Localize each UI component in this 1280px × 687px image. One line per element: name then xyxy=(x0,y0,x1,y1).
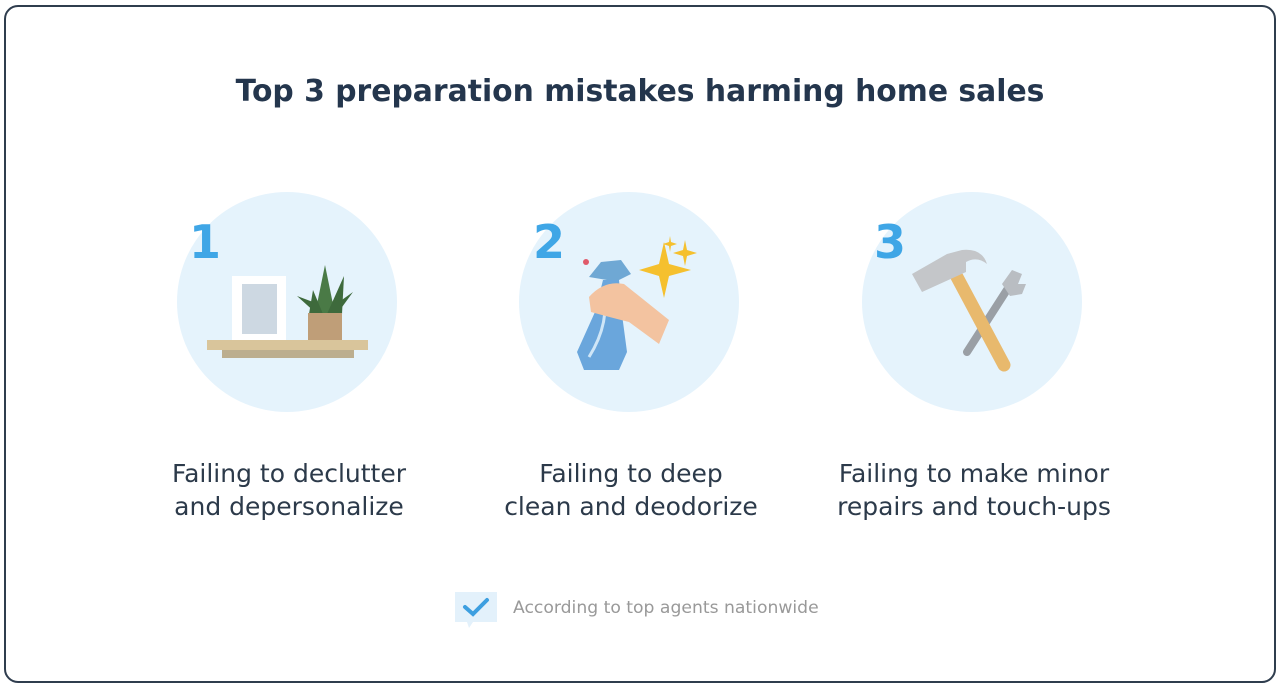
icon 2: hand with spray bottle and sparkles xyxy=(519,192,739,412)
title: Top 3 preparation mistakes harming home sales xyxy=(236,74,1044,109)
label 1: and depersonalize xyxy=(174,492,404,521)
label 3: Failing to make minor xyxy=(839,459,1109,488)
icon 3: hammer and wrench xyxy=(862,192,1082,412)
icon 3: hammer and wrench: 3 xyxy=(874,215,906,269)
label 1 xyxy=(172,459,406,521)
footnote: According to top agents nationwide xyxy=(513,598,819,618)
label 1: Failing to declutter xyxy=(172,459,406,488)
label 2: Failing to deep xyxy=(539,459,723,488)
label 3 xyxy=(837,459,1111,521)
label 2: clean and deodorize xyxy=(504,492,758,521)
icon 2: hand with spray bottle and sparkles: 2 xyxy=(533,215,565,269)
icon 1: shelf with frame and plant: 1 xyxy=(189,215,221,269)
icon: check badge xyxy=(455,592,497,628)
label 2 xyxy=(504,459,758,521)
icon 1: shelf with frame and plant xyxy=(177,192,397,412)
label 3: repairs and touch-ups xyxy=(837,492,1111,521)
